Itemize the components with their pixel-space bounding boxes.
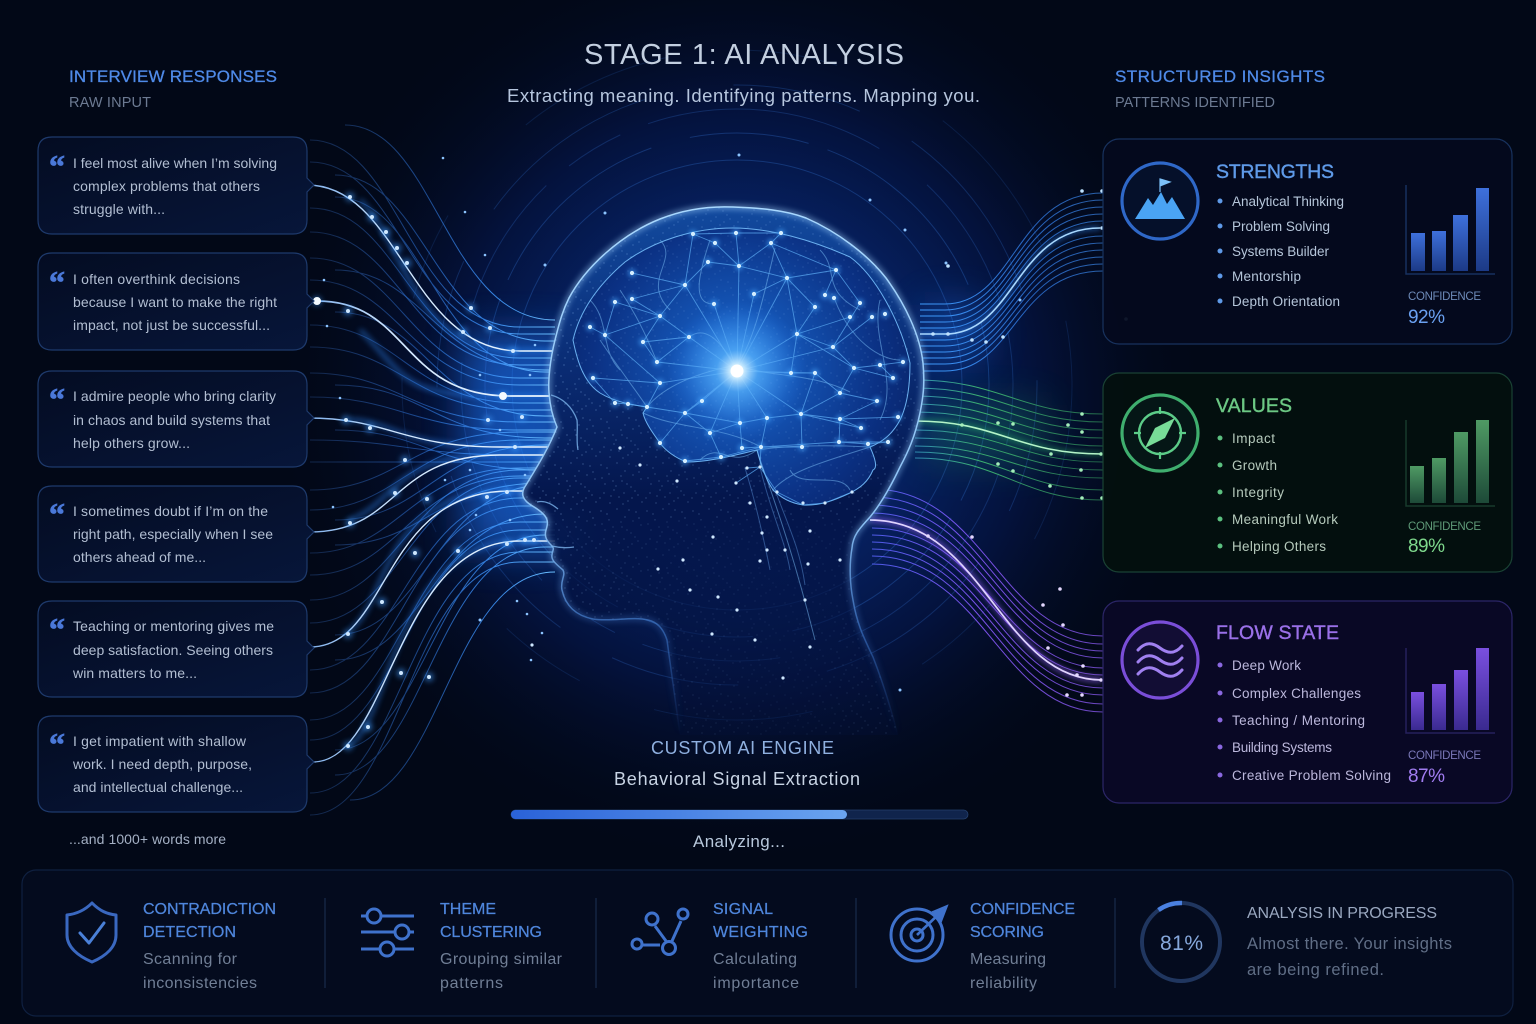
icon: waves xyxy=(1122,622,1198,698)
step: theme clustering: Grouping similar xyxy=(440,951,563,968)
values confidence value: CONFIDENCE xyxy=(1408,521,1481,533)
progress ring and status xyxy=(1142,903,1452,981)
analyzing label: Analyzing... xyxy=(693,832,785,851)
values list: Integrity xyxy=(1232,485,1284,500)
flow bundle 1 xyxy=(310,125,555,372)
card: response 3 xyxy=(38,371,314,467)
flow state list xyxy=(1220,658,1391,783)
card: response 6: “ xyxy=(49,726,65,762)
bar chart: values confidence xyxy=(1406,420,1495,506)
blue stream to strengths xyxy=(920,193,1103,371)
progress ring xyxy=(1142,903,1220,981)
icon: sliders xyxy=(361,909,414,956)
flow bundle 2 xyxy=(310,258,555,416)
icon: mountain with flag xyxy=(1122,163,1198,239)
head outline xyxy=(523,207,924,735)
step: signal weighting: WEIGHTING xyxy=(713,924,808,941)
icon: target with arrow xyxy=(891,907,946,961)
subtitle: Extracting meaning. Identifying patterns. Mapping you. xyxy=(507,85,980,106)
heading: values: VALUES xyxy=(1216,395,1292,417)
values list: Helping Others xyxy=(1232,539,1326,554)
card: response 4: others ahead of me... xyxy=(73,549,206,565)
engine status xyxy=(511,738,968,851)
flow state list: Building Systems xyxy=(1232,740,1332,755)
card: response 3: in chaos and build systems that xyxy=(73,412,270,428)
right column heading xyxy=(1115,67,1325,111)
core glow xyxy=(667,301,807,441)
step: confidence scoring xyxy=(891,901,1075,992)
card: response 2: “ xyxy=(49,264,65,300)
card: response 6 xyxy=(38,716,314,812)
progress bar xyxy=(511,810,968,819)
values list: Meaningful Work xyxy=(1232,512,1338,527)
step: theme clustering xyxy=(361,901,563,992)
flow lines: head to structured insights xyxy=(870,191,1126,712)
strengths confidence value: CONFIDENCE xyxy=(1408,291,1481,303)
step: confidence scoring: reliability xyxy=(970,975,1037,992)
step: signal weighting: importance xyxy=(713,975,799,992)
card: response 5: deep satisfaction. Seeing others xyxy=(73,642,273,658)
step: signal weighting xyxy=(632,901,808,992)
scattered sparks above head xyxy=(480,155,1020,690)
card: response 5: win matters to me... xyxy=(72,665,197,681)
step: theme clustering: patterns xyxy=(440,975,503,992)
card: response 3: I admire people who bring clarity xyxy=(73,388,276,404)
skin speckle xyxy=(520,200,930,740)
step: signal weighting: Calculating xyxy=(713,951,797,968)
brain folds xyxy=(590,240,900,640)
card: response 4: “ xyxy=(49,496,65,532)
heading: strengths: STRENGTHS xyxy=(1216,161,1334,183)
panel: strengths xyxy=(1103,139,1512,344)
strengths list: Problem Solving xyxy=(1232,219,1330,234)
panel: analysis steps bar xyxy=(22,870,1513,1016)
panel: flow state xyxy=(1103,601,1512,803)
step: contradiction detection: CONTRADICTION xyxy=(143,901,276,918)
engine subtitle: Behavioral Signal Extraction xyxy=(614,769,860,789)
step: confidence scoring: CONFIDENCE xyxy=(970,901,1075,918)
values list: Impact xyxy=(1232,431,1275,446)
card: response 2: impact, not just be successful... xyxy=(73,317,270,333)
strengths confidence value: 92% xyxy=(1408,307,1445,328)
stream nodes right xyxy=(913,191,1126,695)
concentric orbit arcs around the head xyxy=(402,50,1072,720)
strengths confidence value xyxy=(1408,291,1481,328)
flow bundle 4 xyxy=(310,432,555,575)
values list xyxy=(1220,431,1338,554)
icon: shield xyxy=(67,903,116,962)
step: contradiction detection xyxy=(67,901,276,992)
card: response 4 xyxy=(38,486,314,582)
card: response 2: because I want to make the right xyxy=(73,294,277,310)
right column heading: STRUCTURED INSIGHTS xyxy=(1115,67,1325,86)
bar chart: flow state confidence xyxy=(1406,648,1495,733)
card: response 3: “ xyxy=(49,381,65,417)
engine label: CUSTOM AI ENGINE xyxy=(651,738,834,758)
card: response 4: I sometimes doubt if I’m on the xyxy=(73,503,268,519)
card: response 6: and intellectual challenge... xyxy=(73,779,243,795)
more words note: ...and 1000+ words more xyxy=(69,831,226,847)
flow bright glow xyxy=(350,200,555,745)
flow state list: Deep Work xyxy=(1232,658,1301,673)
heading: flow state: FLOW STATE xyxy=(1216,622,1339,644)
step: contradiction detection: DETECTION xyxy=(143,924,236,941)
flow state list: Teaching / Mentoring xyxy=(1232,713,1365,728)
step: confidence scoring: Measuring xyxy=(970,951,1046,968)
step: contradiction detection: Scanning for xyxy=(143,951,238,968)
flow state confidence value: CONFIDENCE xyxy=(1408,750,1481,762)
flow bright lines xyxy=(307,185,555,762)
card: response 2 xyxy=(38,253,314,350)
head silhouette fill xyxy=(523,207,924,735)
progress ring and status: are being refined. xyxy=(1247,961,1384,979)
title: STAGE 1: AI ANALYSIS xyxy=(584,39,904,71)
flow lines: interview responses into head xyxy=(307,125,575,815)
right column heading: PATTERNS IDENTIFIED xyxy=(1115,95,1275,111)
flow bundle 3 xyxy=(310,373,555,470)
card: response 1: struggle with... xyxy=(73,201,165,217)
left column heading: INTERVIEW RESPONSES xyxy=(69,67,277,86)
eye, nostril and mouth detail xyxy=(537,395,578,548)
left column heading xyxy=(69,67,277,111)
head and brain illustration xyxy=(480,155,1020,740)
values list: Growth xyxy=(1232,458,1277,473)
card: response 6: I get impatient with shallow xyxy=(73,733,247,749)
title block xyxy=(507,39,980,106)
green stream to values xyxy=(915,380,1103,500)
card: response 4: right path, especially when I see xyxy=(73,526,273,542)
step: contradiction detection: inconsistencies xyxy=(143,975,257,992)
flow nodes left xyxy=(317,158,542,746)
flow state list: Creative Problem Solving xyxy=(1232,768,1391,783)
neural nodes xyxy=(532,233,903,678)
values confidence value xyxy=(1408,521,1481,557)
card: response 3: help others grow... xyxy=(73,435,190,451)
strengths list: Analytical Thinking xyxy=(1232,194,1344,209)
strengths list: Mentorship xyxy=(1232,269,1301,284)
progress ring and status: Almost there. Your insights xyxy=(1247,935,1452,953)
brain stem lines xyxy=(745,467,805,585)
card: response 5 xyxy=(38,601,314,697)
strengths list xyxy=(1220,194,1344,309)
purple stream to flow state xyxy=(870,489,1103,712)
panel: values xyxy=(1103,373,1512,572)
card: response 5: Teaching or mentoring gives me xyxy=(73,618,274,634)
head silhouette glow xyxy=(523,207,924,735)
card: response 1 xyxy=(38,137,314,234)
bar chart: strengths confidence xyxy=(1406,185,1495,274)
step: confidence scoring: SCORING xyxy=(970,924,1044,941)
step: theme clustering: CLUSTERING xyxy=(440,924,542,941)
central burst xyxy=(730,364,744,378)
card: response 2: I often overthink decisions xyxy=(73,271,240,287)
card: response 1: complex problems that others xyxy=(73,178,260,194)
interview response cards xyxy=(38,137,314,847)
values confidence value: 89% xyxy=(1408,536,1445,557)
flow bundle 5 xyxy=(310,470,555,693)
progress ring: 81% xyxy=(1160,932,1203,955)
step: theme clustering: THEME xyxy=(440,901,496,918)
strengths list: Depth Orientation xyxy=(1232,294,1340,309)
flow state list: Complex Challenges xyxy=(1232,686,1361,701)
flow bundle 6 xyxy=(310,522,555,815)
neural network edges xyxy=(590,233,903,505)
card: response 1: I feel most alive when I’m solving xyxy=(73,155,277,171)
cranium speckle xyxy=(540,200,930,520)
icon: connected nodes xyxy=(632,909,688,954)
left column heading: RAW INPUT xyxy=(69,95,151,111)
brain shape xyxy=(573,228,910,505)
progress ring and status: ANALYSIS IN PROGRESS xyxy=(1247,905,1437,922)
step: signal weighting: SIGNAL xyxy=(713,901,773,918)
flow state confidence value: 87% xyxy=(1408,766,1445,787)
card: response 6: work. I need depth, purpose, xyxy=(72,756,252,772)
flow state confidence value xyxy=(1408,750,1481,787)
card: response 1: “ xyxy=(49,148,65,184)
card: response 5: “ xyxy=(49,611,65,647)
icon: compass xyxy=(1122,395,1198,471)
strengths list: Systems Builder xyxy=(1232,244,1330,259)
